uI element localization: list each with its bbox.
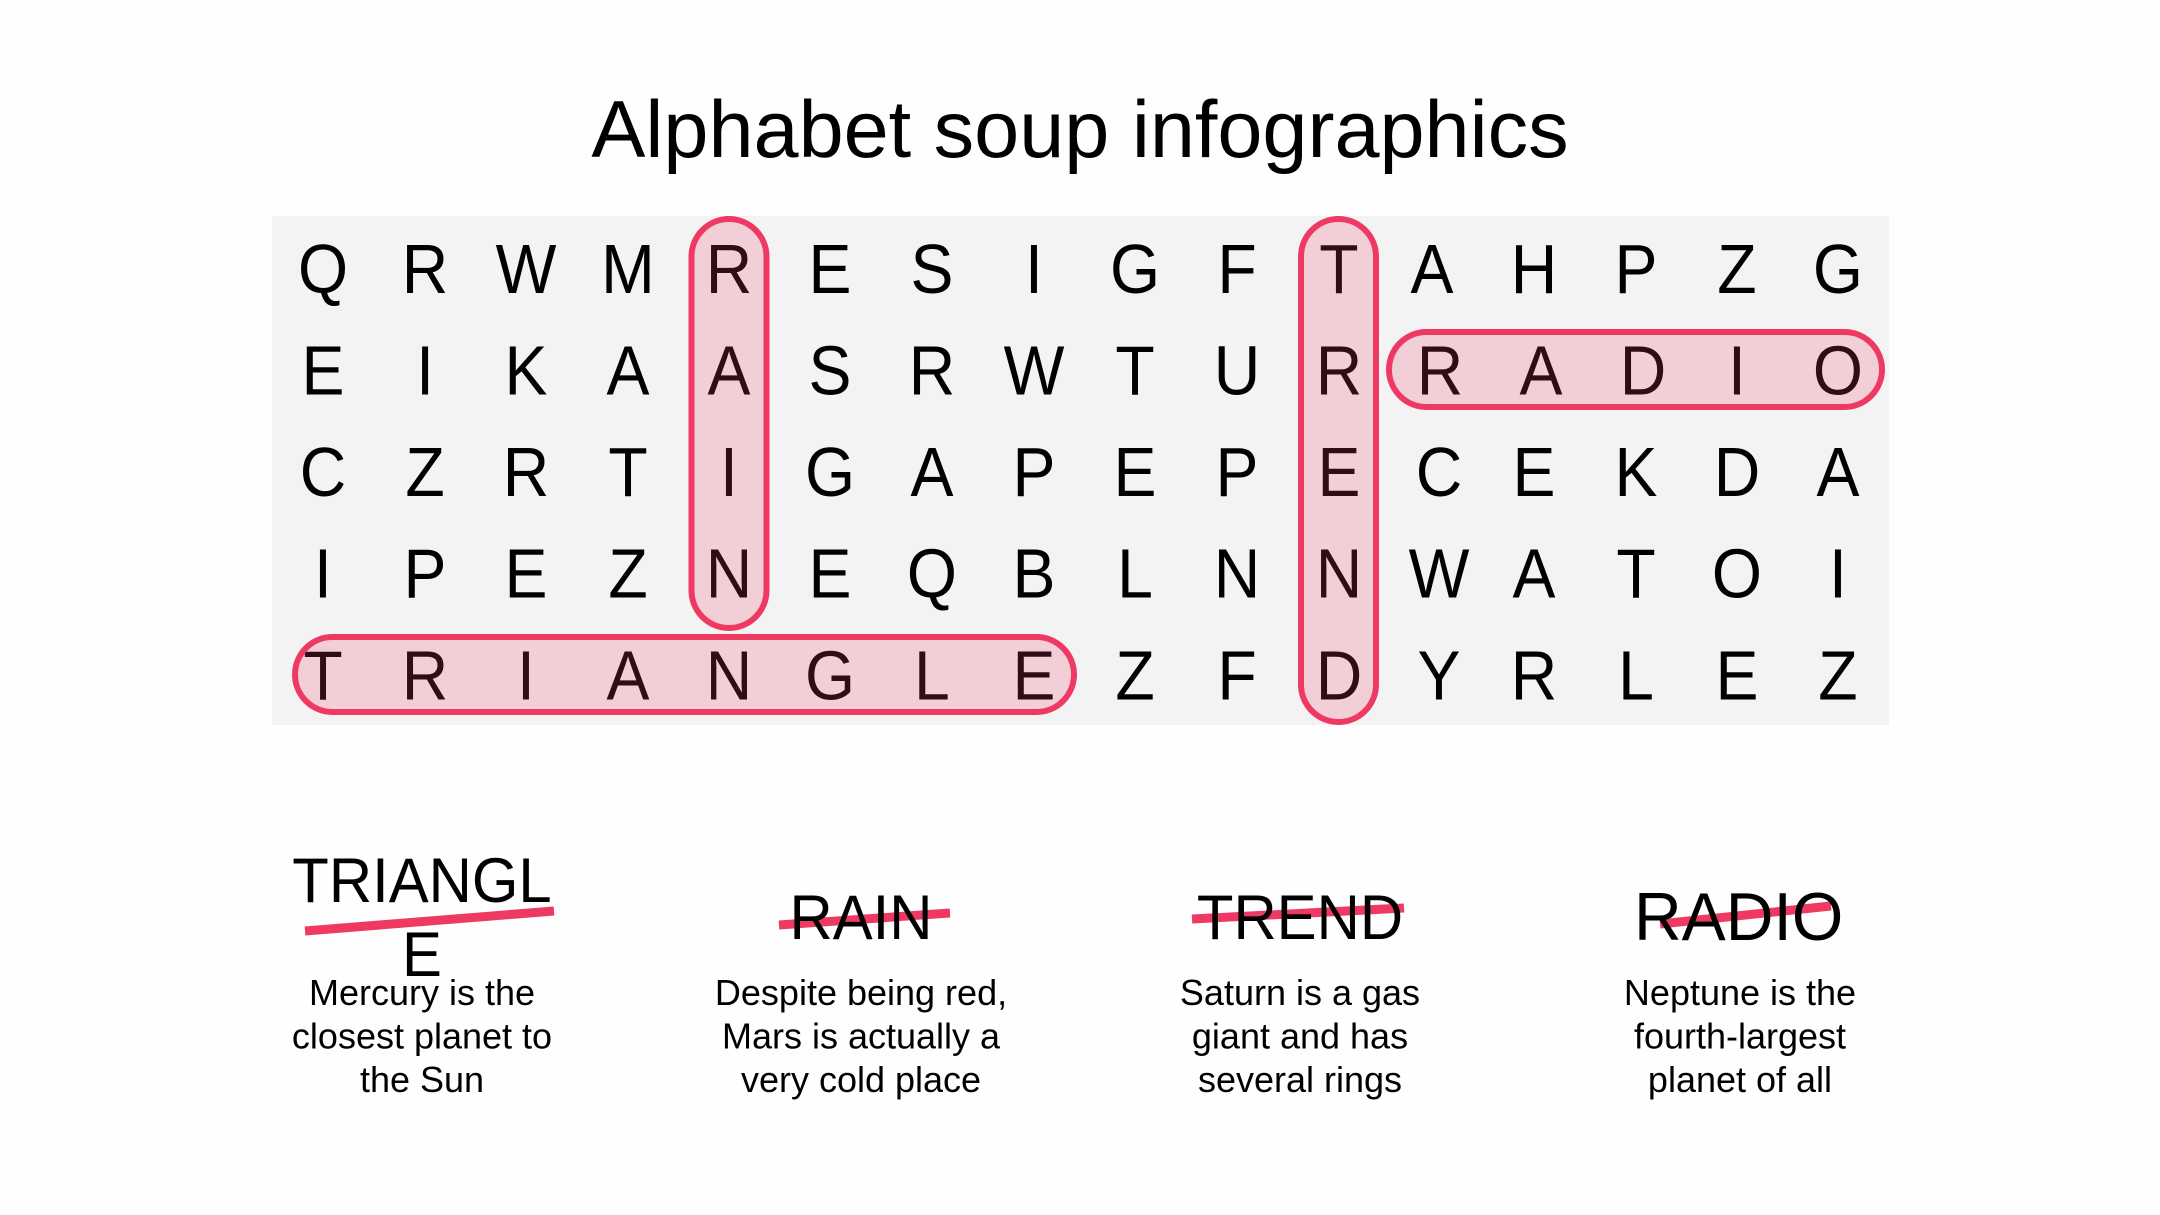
word heading: TRIANGL xyxy=(292,846,552,916)
grid background xyxy=(272,216,1889,725)
description: the Sun xyxy=(360,1059,484,1100)
strike-through line xyxy=(779,913,950,925)
strike-through line xyxy=(305,911,554,931)
word heading: RAIN xyxy=(789,883,932,953)
description: fourth-largest xyxy=(1634,1016,1846,1056)
highlight: TREND xyxy=(1301,219,1376,722)
word heading: E xyxy=(402,920,442,990)
grid letters: TRIANGLEZFDYRLEZ xyxy=(303,637,1858,715)
strike-through line xyxy=(1660,906,1831,924)
description: planet of all xyxy=(1648,1059,1832,1100)
panel: word search grid xyxy=(272,216,1889,725)
panel: word RAIN xyxy=(715,883,1007,1100)
title: Alphabet soup infographics xyxy=(591,85,1569,175)
highlight: RAIN xyxy=(692,219,766,628)
description: closest planet to xyxy=(292,1016,552,1056)
grid letters xyxy=(298,231,1863,715)
description: Mercury is the xyxy=(309,972,535,1013)
highlight: TRIANGLE xyxy=(295,637,1074,712)
strike-through line xyxy=(1192,908,1404,919)
word heading: RADIO xyxy=(1634,879,1843,955)
grid letters: IPEZNEQBLNNWATOI xyxy=(314,535,1847,613)
grid letters: EIKAASRWTURRADIO xyxy=(302,332,1863,410)
description: Neptune is the xyxy=(1624,972,1856,1013)
description: Mars is actually a xyxy=(722,1016,1001,1056)
grid letters: QRWMRESIGFTAHPZG xyxy=(298,231,1863,309)
grid letters: CZRTIGAPEPECEKDA xyxy=(300,434,1860,512)
description: several rings xyxy=(1198,1059,1402,1100)
description: very cold place xyxy=(741,1059,981,1100)
panel: word TRIANGLE xyxy=(292,846,554,1100)
highlight: RADIO xyxy=(1389,332,1882,407)
description: giant and has xyxy=(1192,1016,1408,1056)
word heading: TREND xyxy=(1197,883,1403,953)
description: Saturn is a gas xyxy=(1180,972,1420,1013)
panel: word TREND xyxy=(1180,883,1420,1100)
description: Despite being red, xyxy=(715,972,1007,1013)
panel: word RADIO xyxy=(1624,879,1856,1100)
